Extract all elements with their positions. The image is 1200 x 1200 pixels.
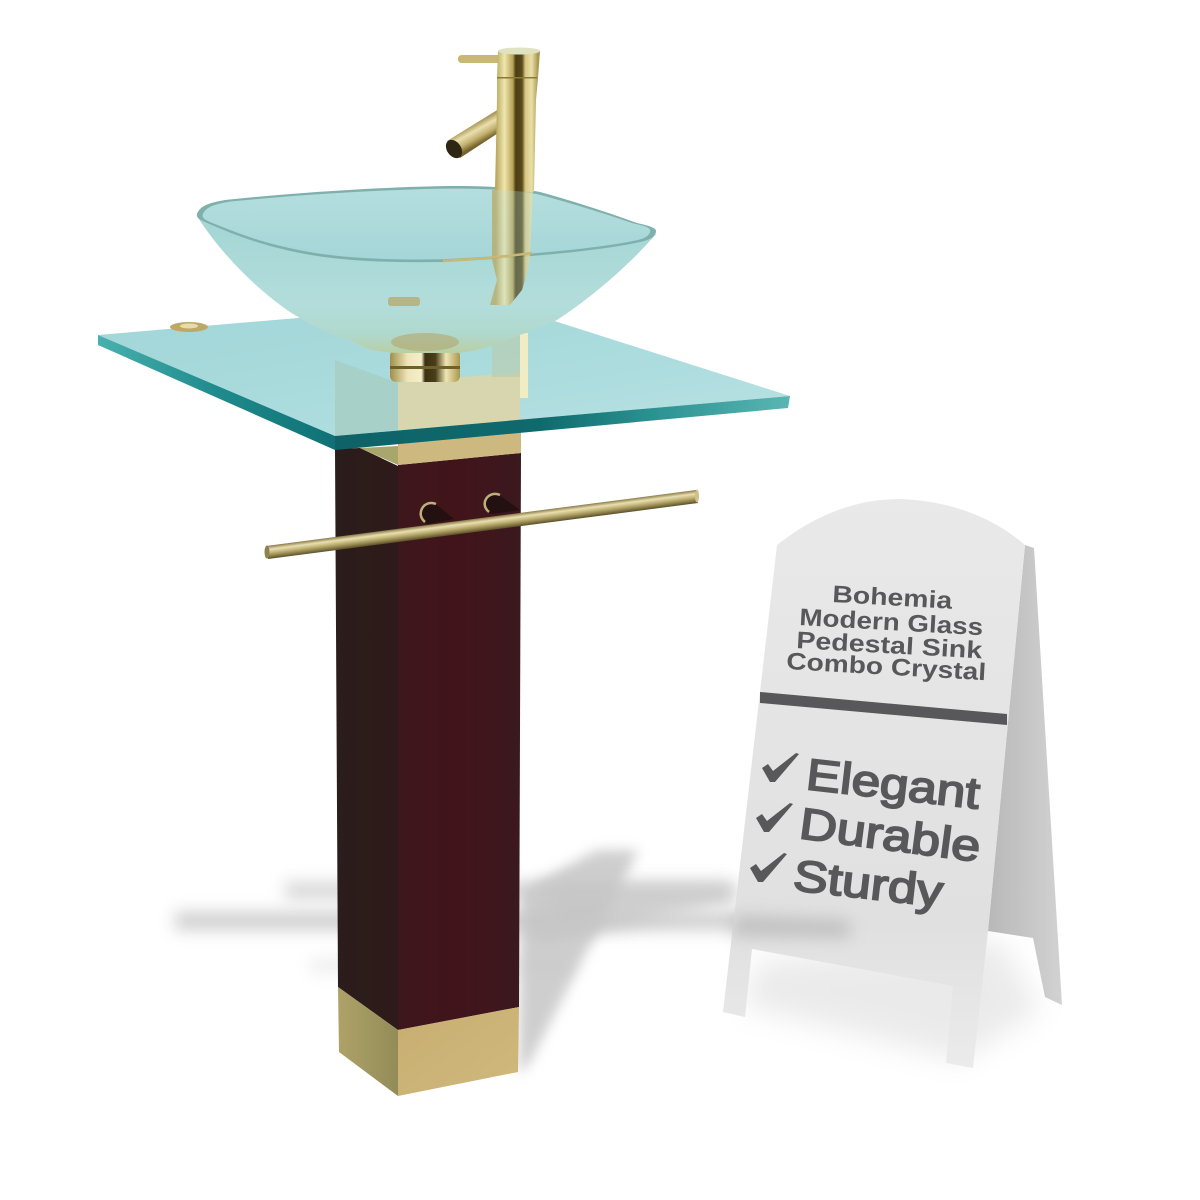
right edge: [335, 396, 790, 450]
top surface: [98, 317, 790, 436]
interior fixture: [388, 297, 420, 306]
sign heading: Combo Crystal: [786, 648, 987, 686]
bowl rim: [197, 186, 656, 262]
bowl base ring: [390, 350, 460, 382]
sign heading: Pedestal Sink: [796, 627, 984, 664]
pedestal wood right face: [398, 453, 521, 1030]
faucet: [443, 48, 540, 192]
pedestal seen through glass: [335, 360, 398, 436]
feature: Durable: [756, 799, 984, 872]
feature: Elegant: [762, 750, 982, 819]
sign panel shadow band: [732, 915, 850, 938]
bowl outer body: [197, 216, 656, 353]
sign front panel: [723, 499, 1025, 1068]
feature: Elegant: Elegant: [804, 750, 982, 819]
column: [495, 51, 540, 192]
bowl inner basin: [203, 189, 650, 259]
handle: [458, 55, 504, 63]
bar: [266, 490, 698, 559]
sign back panel: [988, 545, 1062, 1005]
feature: Sturdy: [750, 851, 945, 917]
pedestal column: [335, 432, 521, 1096]
left edge: [98, 335, 335, 450]
cast shadow of the sink: [175, 850, 1040, 1075]
gold rim glint: [443, 253, 532, 261]
mounting knob: [170, 322, 208, 332]
sign divider bar: [760, 692, 1007, 725]
glass vessel bowl: [197, 186, 656, 382]
feature: Durable: Durable: [797, 799, 984, 872]
sign heading: [786, 581, 987, 686]
gold collar: [360, 446, 398, 465]
feature: Sturdy: Sturdy: [791, 851, 945, 917]
pedestal wood left face: [335, 448, 398, 1030]
faucet reflection in glass: [492, 333, 528, 398]
faucet reflection in bowl: [490, 190, 533, 305]
hooks: [420, 494, 520, 524]
glass countertop: [98, 317, 790, 450]
spout: [447, 104, 515, 158]
sandwich board sign: [723, 499, 1062, 1068]
sign heading: Bohemia: [832, 581, 954, 615]
gold base: [338, 987, 398, 1096]
drain area: [391, 333, 459, 351]
sign heading: Modern Glass: [799, 604, 984, 641]
towel bar: [264, 490, 699, 559]
